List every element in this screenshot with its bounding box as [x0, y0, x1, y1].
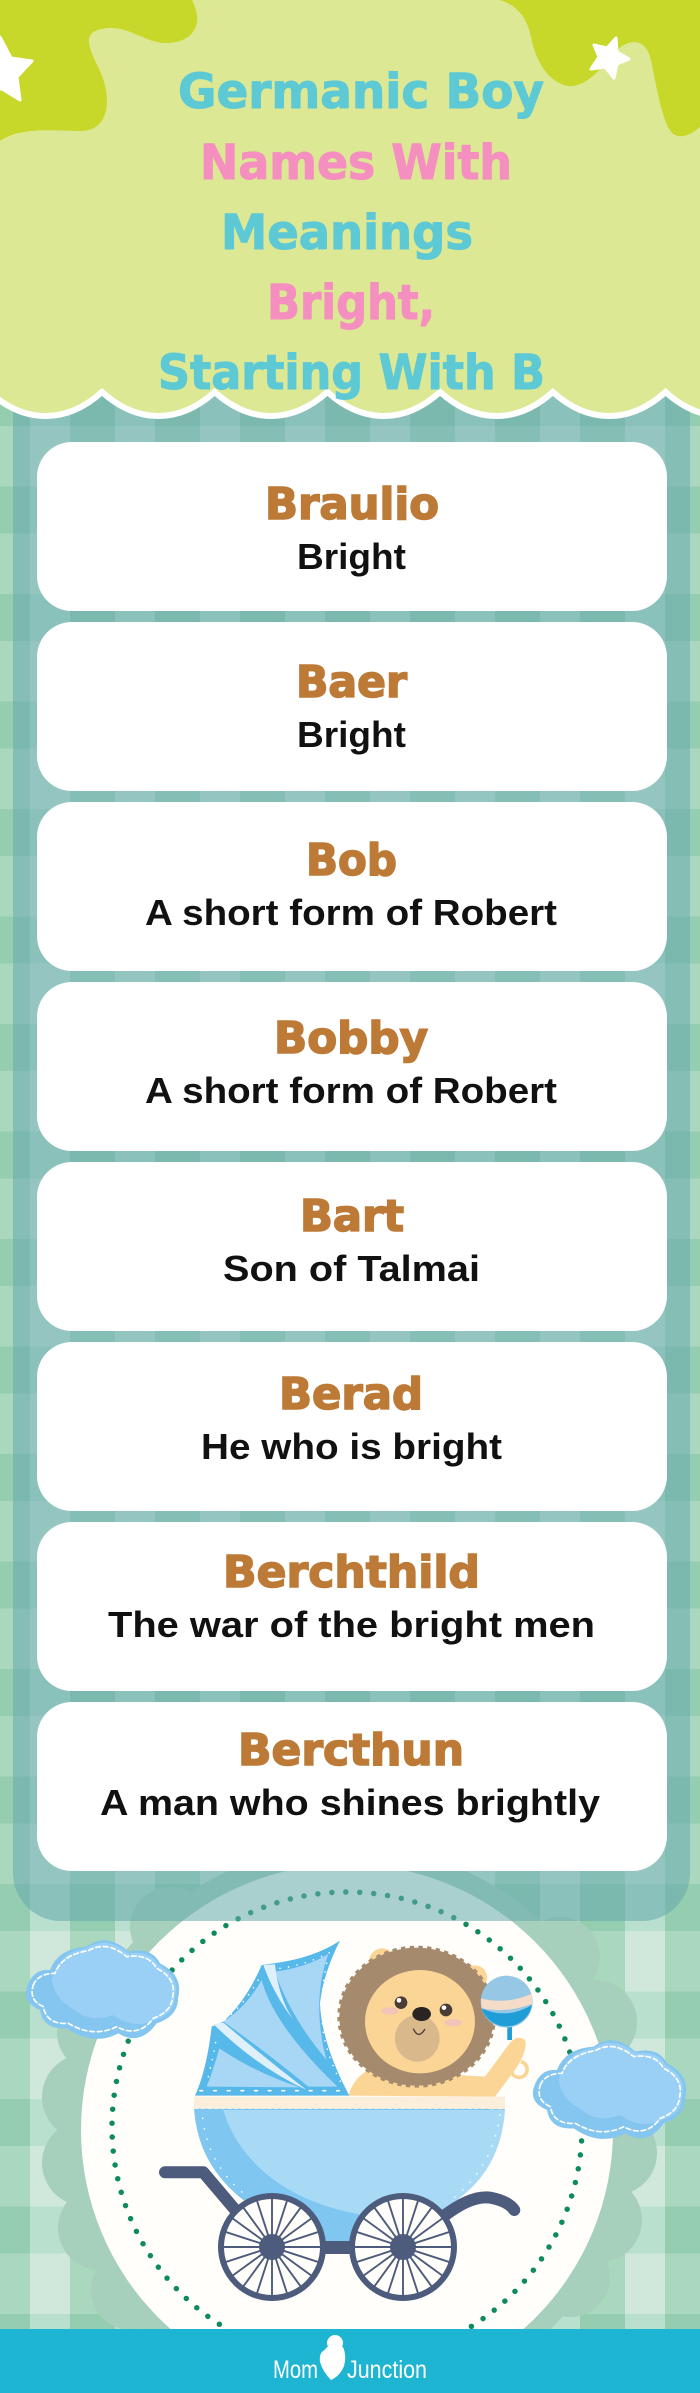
title: Starting With B	[158, 345, 545, 401]
card: Bobby	[37, 982, 667, 1151]
card: Berchthild	[37, 1522, 667, 1691]
top-right lime blob	[500, 0, 700, 136]
lion body and arm	[348, 2038, 526, 2097]
card: Berchthild: Berchthild	[223, 1547, 480, 1598]
icon: star right	[591, 38, 629, 78]
title: Germanic Boy	[178, 64, 544, 120]
card: Braulio	[37, 442, 667, 611]
title	[158, 64, 545, 401]
lion ears	[369, 1948, 487, 1989]
card: Bart: Son of Talmai	[223, 1248, 480, 1289]
footer bar	[0, 2329, 700, 2393]
logo wordmark	[273, 2356, 427, 2384]
title: Meanings	[221, 205, 473, 261]
card: Braulio: Bright	[297, 536, 406, 577]
card: Bercthun: A man who shines brightly	[100, 1782, 600, 1823]
pram canopy	[195, 1941, 349, 2096]
top-left lime blob	[0, 0, 197, 141]
card: Bart	[37, 1162, 667, 1331]
card: Bob: A short form of Robert	[145, 892, 557, 933]
card: Berchthild: The war of the bright men	[108, 1604, 595, 1645]
pram handles	[165, 2172, 514, 2217]
icon: MomJunction logo mark	[320, 2335, 345, 2380]
lion mane	[339, 1948, 494, 2086]
pram bowl	[194, 2097, 505, 2245]
card: Bobby: A short form of Robert	[145, 1070, 557, 1111]
card: Berad: Berad	[279, 1369, 423, 1420]
logo wordmark: Mom	[273, 2356, 318, 2384]
name cards	[37, 442, 667, 1871]
icon: left cloud	[26, 1940, 179, 2039]
card: Braulio: Braulio	[265, 479, 439, 530]
card: Berad	[37, 1342, 667, 1511]
white circle	[81, 1864, 613, 2393]
illustration: lion in pram	[165, 1941, 533, 2298]
lion face	[365, 1970, 475, 2073]
translucent list panel	[13, 300, 690, 1921]
lion and pram top	[165, 1941, 533, 2245]
left wheel	[221, 2196, 323, 2298]
logo wordmark: Junction	[347, 2356, 427, 2384]
card: Bob	[37, 802, 667, 971]
scalloped green backdrop behind circle	[42, 1845, 657, 2393]
rattle	[481, 1976, 533, 2040]
card: Baer	[37, 622, 667, 791]
title: Bright,	[267, 275, 435, 331]
icon: star left	[0, 37, 32, 100]
card: Bercthun: Bercthun	[238, 1725, 464, 1776]
card: Bercthun	[37, 1702, 667, 1871]
card: Bart: Bart	[300, 1191, 404, 1242]
card: Baer: Bright	[297, 714, 406, 755]
header banner	[0, 0, 700, 416]
card: Berad: He who is bright	[201, 1426, 502, 1467]
card: Bob: Bob	[306, 835, 397, 886]
card: Baer: Baer	[296, 657, 407, 708]
icon: right cloud	[533, 2040, 686, 2139]
wheel axle	[272, 2241, 403, 2254]
lion fingers	[511, 2062, 527, 2077]
dotted green ring	[112, 1892, 582, 2362]
scalloped header background	[0, 0, 700, 416]
title: Names With	[200, 135, 512, 191]
card: Bobby: Bobby	[274, 1013, 428, 1064]
right wheel	[352, 2196, 454, 2298]
